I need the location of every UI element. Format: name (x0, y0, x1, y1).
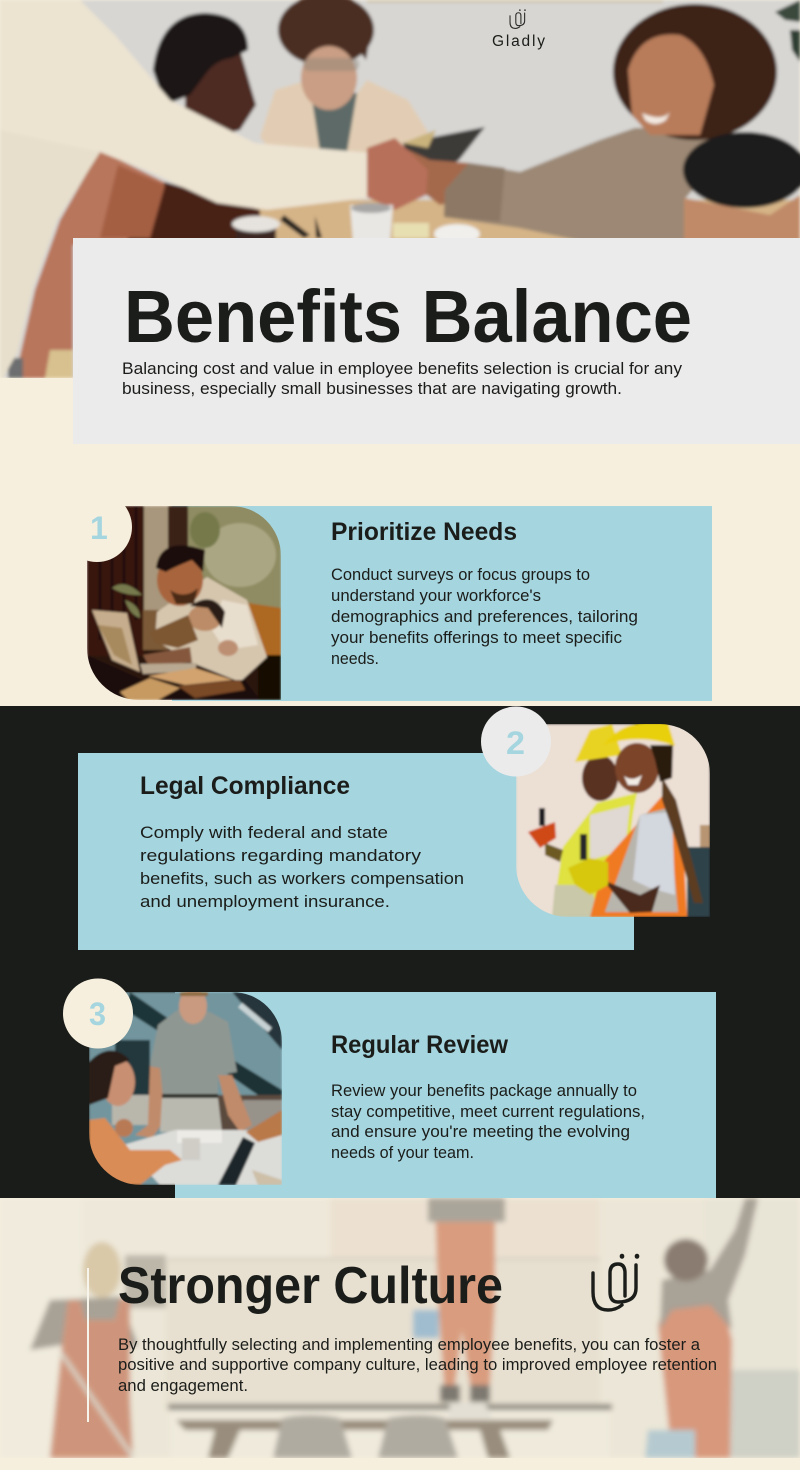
intro text: Balancing cost and value in employee benefits selection is crucial for any (122, 359, 683, 378)
number badge 1 (62, 492, 132, 562)
cream sweater arm (0, 0, 368, 212)
face (615, 743, 659, 793)
closing body: and engagement. (118, 1376, 248, 1395)
right worker (658, 1295, 732, 1458)
closing section: Stronger Culture (0, 1198, 800, 1458)
intro text: business, especially small businesses that are navigating growth. (122, 379, 622, 398)
step 3 body: and ensure you're meeting the evolving (331, 1123, 630, 1141)
hero photo: handshake (0, 0, 800, 378)
baby (188, 605, 222, 631)
book (402, 126, 486, 165)
man head (185, 50, 256, 135)
right hands (246, 1110, 282, 1142)
ponytail (662, 777, 703, 903)
cups (350, 205, 393, 242)
step 2 heading: Legal Compliance (140, 772, 350, 800)
dark band background (0, 706, 800, 1198)
plant (775, 0, 800, 22)
table (256, 197, 792, 238)
right worker vest (590, 795, 687, 917)
jacket (155, 577, 267, 682)
logo: Gladly top: Gladly (492, 33, 545, 50)
left worker (30, 1297, 138, 1350)
step 3 heading: Regular Review (331, 1031, 509, 1059)
step 2 body: benefits, such as workers compensation (140, 870, 464, 888)
right woman sweater (444, 128, 715, 245)
number badge 1: 1 (90, 510, 108, 546)
step 1 body: understand your workforce's (331, 587, 541, 605)
arm and yellow glove (603, 880, 660, 913)
step 1 panel: Prioritize Needs (87, 506, 712, 701)
step 3 body: Review your benefits package annually to (331, 1082, 637, 1100)
step 3 body: stay competitive, meet current regulations, (331, 1103, 645, 1121)
step 3 body (331, 1082, 645, 1162)
title panel (73, 238, 800, 444)
hands (407, 148, 470, 206)
step 2 body: and unemployment insurance. (140, 893, 390, 911)
faded background photo: cleaning crew (0, 1198, 800, 1458)
plant (112, 584, 142, 618)
table and chairs (176, 1420, 553, 1458)
laptop (218, 1137, 255, 1185)
left worker head (582, 755, 618, 801)
number badge 2 (481, 706, 551, 776)
closing body (118, 1335, 717, 1395)
man (157, 554, 203, 606)
step 1 photo: father with baby at laptop (87, 506, 281, 700)
number badge 2: 2 (506, 725, 525, 761)
central woman blazer (260, 80, 428, 155)
right woman head (613, 4, 777, 140)
step 1 body (331, 566, 638, 668)
laptop (92, 610, 140, 672)
closing body: positive and supportive company culture, leading to improved employee retention (118, 1355, 717, 1374)
step 3 body: needs of your team. (331, 1144, 474, 1162)
step 2 body: regulations regarding mandatory (140, 847, 422, 865)
step 1 body: your benefits offerings to meet specific (331, 629, 622, 647)
step 2 body: Comply with federal and state (140, 824, 388, 842)
left worker vest (556, 791, 638, 900)
step 2 photo: construction workers (516, 723, 710, 917)
arm and orange glove (545, 843, 563, 862)
table (87, 655, 260, 700)
step 3 photo: team at table (89, 988, 282, 1185)
step 1 body: needs. (331, 650, 379, 668)
rust shirt (18, 150, 166, 378)
sofa (248, 603, 281, 657)
number badge 3: 3 (89, 996, 106, 1032)
step 1 body: Conduct surveys or focus groups to (331, 566, 590, 584)
title: Benefits Balance: Benefits Balance (124, 275, 692, 358)
step 1 heading: Prioritize Needs (331, 518, 517, 546)
step 2 body (140, 824, 464, 911)
logo: Gladly top (492, 10, 545, 50)
man (150, 1008, 237, 1100)
number badge 3 (63, 978, 133, 1048)
foreground head (683, 132, 800, 208)
step 2 panel: Legal Compliance (78, 706, 710, 950)
closing body: By thoughtfully selecting and implementing employee benefits, you can foster a (118, 1335, 701, 1354)
closing title: Stronger Culture (118, 1257, 503, 1315)
vertical accent line (87, 1268, 89, 1422)
hat (603, 723, 675, 746)
step 3 panel: Regular Review (63, 978, 716, 1198)
middle worker (435, 1205, 495, 1385)
woman (89, 1118, 182, 1185)
table (123, 1130, 282, 1185)
logo mark large (593, 1256, 637, 1310)
step 1 body: demographics and preferences, tailoring (331, 608, 638, 626)
intro text (122, 359, 683, 398)
